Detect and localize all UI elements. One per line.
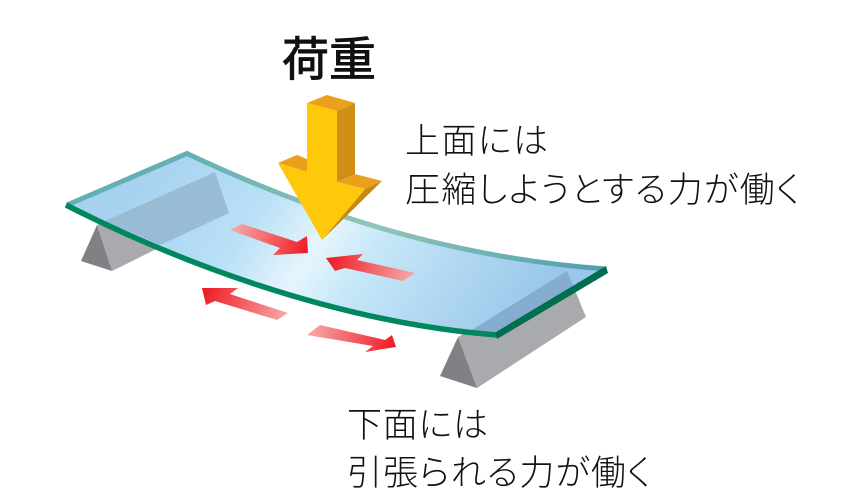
right support prism [440, 271, 586, 388]
red arrow: lower surface tension to left [202, 288, 288, 320]
glass plate [66, 151, 608, 339]
text: upper surface compression: 上面には [405, 122, 548, 161]
text: lower surface tension [347, 406, 651, 493]
right edge of glass [496, 266, 608, 339]
text: lower surface tension: 引張られる力が働く [347, 454, 651, 493]
left support prism [81, 172, 229, 271]
red arrow: upper surface compression from right [326, 254, 415, 281]
text: upper surface compression [405, 122, 800, 210]
red arrow: lower surface tension to right [307, 325, 396, 352]
red arrow: upper surface compression from left [230, 224, 308, 255]
load arrow [278, 95, 382, 240]
front edge of glass, curved [66, 205, 497, 335]
heading: load: 荷重 [282, 33, 376, 86]
back edge of glass [67, 154, 606, 269]
text: lower surface tension: 下面には [347, 406, 488, 445]
left support seen through glass [105, 172, 229, 245]
text: upper surface compression: 圧縮しようとする力が働く [405, 171, 800, 210]
right support seen through glass [470, 271, 575, 336]
